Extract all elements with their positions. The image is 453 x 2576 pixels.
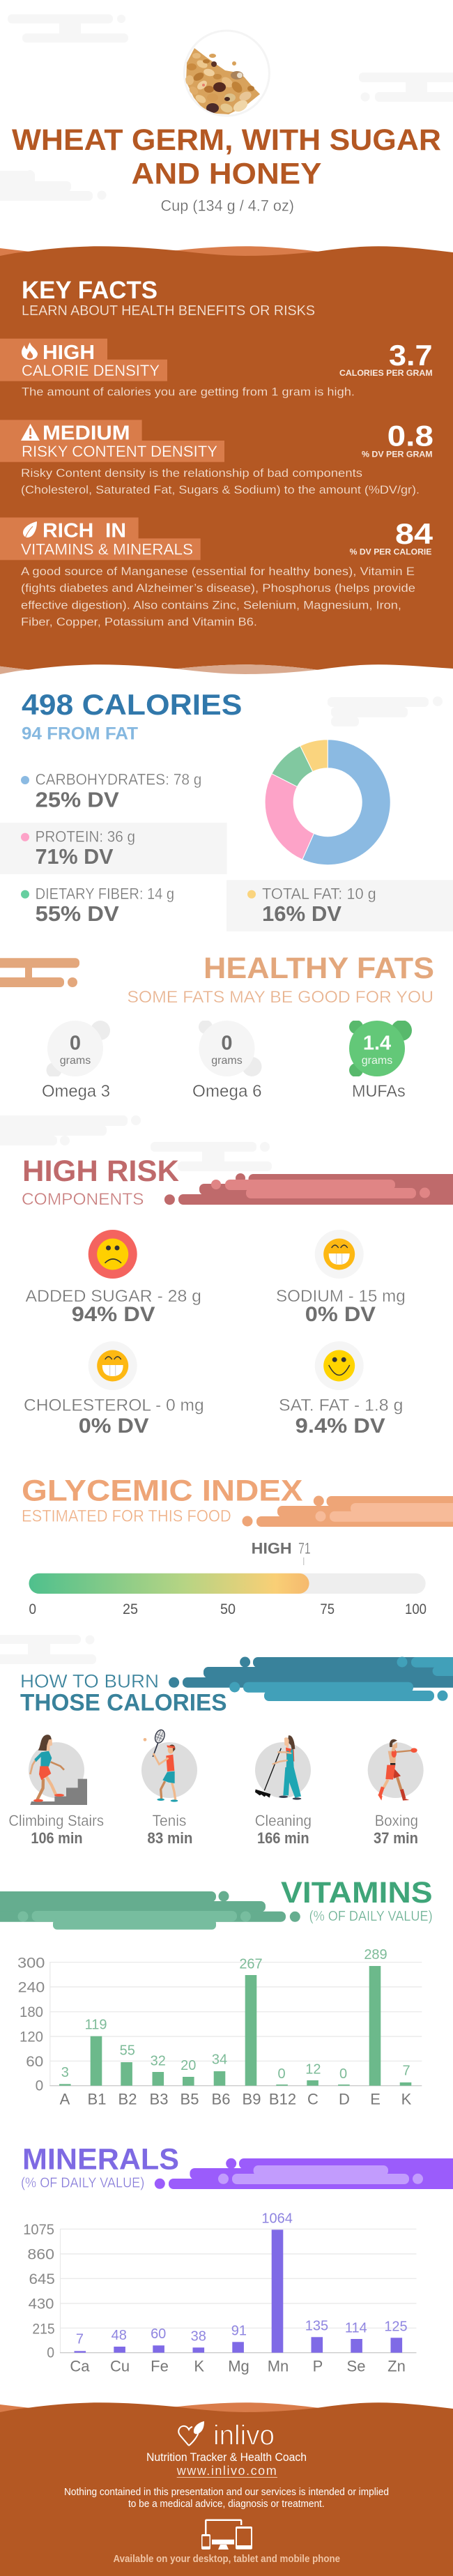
activity: climbing stairs: 106 min — [31, 1829, 83, 1847]
legend: protein — [0, 823, 227, 874]
metric: omega 3: 0 — [70, 1032, 81, 1055]
item: added sugar: 94% DV — [72, 1303, 155, 1326]
subheading: (% OF DAILY VALUE) — [309, 1909, 433, 1924]
fact: rich in vitamins and minerals: Fiber, Copper, Potassium and Vitamin B6. — [21, 616, 257, 628]
fact: rich in vitamins and minerals: VITAMINS & MINERALS — [21, 541, 193, 558]
gauge axis labels: 25 — [123, 1601, 138, 1617]
subheading: components: COMPONENTS — [22, 1190, 144, 1209]
bar chart: vitamins: 12 — [305, 2061, 321, 2077]
bar chart: vitamins: 0 — [36, 2078, 43, 2094]
item: saturated fat: SAT. FAT - 1.8 g — [279, 1396, 403, 1415]
legend: dietary fiber: 55% DV — [36, 901, 119, 926]
bar chart: minerals: 0 — [47, 2345, 54, 2361]
fact: calorie density: 3.7 — [389, 339, 433, 372]
bar chart: minerals: Zn — [387, 2358, 406, 2375]
heading: healthy fats: HEALTHY FATS — [204, 952, 434, 985]
subheading: ESTIMATED FOR THIS FOOD — [22, 1507, 231, 1525]
panel: healthy fats — [0, 952, 434, 1101]
bar chart: vitamins: K — [401, 2090, 412, 2108]
metric: omega 3: Omega 3 — [42, 1082, 110, 1101]
decorative banner — [0, 958, 79, 987]
fact: rich in vitamins and minerals: effective digestion). Also contains Zinc, Selenium, Magnesium, Iron, — [21, 599, 401, 611]
item: cholesterol: 0% DV — [79, 1415, 149, 1438]
bar chart: vitamins: 180 — [20, 2004, 43, 2020]
panel: minerals — [21, 2143, 453, 2375]
bar chart: vitamins: E — [370, 2090, 381, 2108]
activity: tennis: 83 min — [147, 1829, 192, 1847]
bar chart: vitamins: A — [60, 2090, 70, 2108]
logo: inlivo: inlivo — [213, 2421, 275, 2451]
gauge axis labels: 0 — [29, 1601, 36, 1617]
bar chart: minerals: Cu — [110, 2358, 130, 2375]
activity: boxing: Boxing — [375, 1812, 418, 1829]
bar chart: vitamins: 0 — [339, 2066, 347, 2082]
fact: rich in vitamins and minerals: (fights diabetes and Alzheimer’s disease), Phosphorus (helps provide — [21, 582, 415, 595]
metric: omega 3: grams — [60, 1055, 91, 1067]
bar chart: minerals: 135 — [305, 2319, 328, 2334]
bar chart: minerals: 60 — [151, 2326, 166, 2342]
activity: cleaning — [255, 1735, 312, 1847]
item: cholesterol — [24, 1341, 204, 1438]
heading: minerals: MINERALS — [22, 2143, 179, 2177]
activity: boxing: 37 min — [374, 1829, 418, 1847]
fact: calorie density: HIGH — [43, 342, 95, 364]
bar chart: vitamins: 267 — [239, 1956, 263, 1972]
bar chart: vitamins: B1 — [88, 2090, 106, 2108]
gauge axis labels: 50 — [220, 1601, 236, 1617]
bar chart: minerals — [23, 2211, 416, 2375]
legend: protein: PROTEIN: 36 g — [36, 828, 135, 846]
panel: key facts — [0, 246, 453, 674]
bar chart: vitamins: B3 — [150, 2090, 168, 2108]
bar chart: vitamins: 60 — [26, 2054, 43, 2070]
bar chart: minerals: P — [313, 2358, 323, 2375]
bar chart: vitamins: B6 — [212, 2090, 230, 2108]
gauge value label: HIGH — [252, 1539, 292, 1557]
bar chart: minerals: Fe — [151, 2358, 169, 2375]
activity: cleaning: 166 min — [257, 1829, 309, 1847]
bar chart: minerals: 48 — [112, 2328, 127, 2343]
decorative banner — [164, 1173, 453, 1205]
heading: vitamins: VITAMINS — [281, 1876, 433, 1910]
heading: glycemic index: GLYCEMIC INDEX — [22, 1474, 303, 1507]
bar chart: minerals: Mn — [268, 2358, 289, 2375]
panel: vitamins — [0, 1876, 433, 2108]
heading: calories: 498 CALORIES — [22, 688, 242, 721]
disclaimer: to be a medical advice, diagnosis or treatment. — [128, 2499, 325, 2510]
legend: protein: 71% DV — [36, 844, 114, 869]
bar chart: minerals: 125 — [384, 2319, 408, 2334]
metric: omega 3 — [42, 1021, 110, 1101]
bar chart: vitamins — [17, 1947, 422, 2108]
gauge axis labels: 75 — [320, 1601, 335, 1617]
gauge value label: 71 — [298, 1539, 311, 1557]
bar chart: minerals: 215 — [32, 2321, 55, 2337]
decorative banner — [0, 1891, 300, 1930]
item: sodium: 0% DV — [305, 1303, 376, 1326]
bar chart: minerals: 1075 — [23, 2222, 54, 2238]
legend: dietary fiber: DIETARY FIBER: 14 g — [36, 885, 174, 902]
legend: carbohydrates: CARBOHYDRATES: 78 g — [36, 771, 201, 788]
bar chart: vitamins: B5 — [181, 2090, 199, 2108]
gauge axis labels — [29, 1601, 427, 1617]
donut chart — [265, 740, 390, 865]
item: saturated fat: 9.4% DV — [295, 1415, 385, 1438]
item: cholesterol: CHOLESTEROL - 0 mg — [24, 1396, 204, 1415]
fact: risky content density — [0, 419, 433, 496]
bar chart: minerals: Se — [347, 2358, 365, 2375]
legend: total fat: 16% DV — [262, 901, 341, 926]
icon: leaf — [23, 521, 37, 538]
metric: MUFAs: grams — [362, 1055, 392, 1067]
bar chart: minerals: 91 — [231, 2323, 247, 2338]
title: AND HONEY — [131, 158, 322, 191]
metric: omega 6: grams — [211, 1055, 243, 1067]
activity: climbing stairs: Climbing Stairs — [8, 1812, 104, 1829]
metric: omega 6: Omega 6 — [192, 1082, 262, 1101]
fact: risky content density: (Cholesterol, Saturated Fat, Sugars & Sodium) to the amount (%DV/gr). — [21, 484, 420, 496]
item: added sugar — [25, 1230, 201, 1326]
bar chart: vitamins: 32 — [151, 2053, 166, 2068]
fact: risky content density: % DV PER GRAM — [362, 450, 433, 459]
title: WHEAT GERM, WITH SUGAR — [12, 123, 441, 157]
icon: warning triangle — [21, 424, 40, 441]
fact: calorie density — [0, 339, 433, 399]
subheading: SOME FATS MAY BE GOOD FOR YOU — [127, 988, 433, 1007]
item: sodium: SODIUM - 15 mg — [276, 1287, 406, 1306]
decorative banner — [169, 1656, 453, 1701]
heading: those calories: THOSE CALORIES — [20, 1689, 227, 1716]
subheading: from fat: 94 FROM FAT — [22, 724, 138, 744]
gauge value label — [252, 1539, 311, 1565]
fact: calorie density: CALORIE DENSITY — [22, 362, 160, 379]
decorative banner — [243, 1496, 453, 1527]
activity: climbing stairs — [8, 1735, 104, 1847]
heading: how to burn: HOW TO BURN — [20, 1671, 159, 1692]
bar chart: minerals: 114 — [345, 2320, 367, 2335]
panel: high risk components — [22, 1154, 453, 1438]
item: saturated fat — [279, 1341, 403, 1438]
fact: rich in vitamins and minerals: A good source of Manganese (essential for healthy bones), Vitamin E — [21, 565, 415, 578]
bar chart: vitamins: D — [339, 2090, 350, 2108]
serving size: Cup (134 g / 4.7 oz) — [160, 197, 294, 215]
bar chart: minerals: 38 — [191, 2329, 206, 2344]
legend: total fat — [227, 880, 453, 931]
fact: rich in vitamins and minerals: RICH IN — [43, 520, 126, 542]
fact: rich in vitamins and minerals: % DV PER CALORIE — [350, 547, 431, 557]
activity: boxing — [368, 1739, 424, 1847]
bar chart: vitamins: 3 — [61, 2065, 69, 2080]
icon: flame — [22, 342, 38, 360]
fact: risky content density: 0.8 — [387, 419, 433, 452]
gauge bar — [29, 1573, 426, 1594]
legend: total fat: TOTAL FAT: 10 g — [262, 885, 376, 902]
fact: calorie density: CALORIES PER GRAM — [339, 368, 433, 378]
bar chart: minerals: Mg — [228, 2358, 249, 2375]
bar chart: vitamins: 120 — [20, 2029, 43, 2045]
heading: key facts: KEY FACTS — [22, 277, 158, 304]
bar chart: minerals: 7 — [76, 2332, 84, 2347]
panel: how to burn calories — [8, 1656, 453, 1847]
activity: cleaning: Cleaning — [255, 1812, 312, 1829]
bar chart: vitamins: 300 — [17, 1956, 45, 1972]
title — [12, 123, 441, 191]
bar chart: vitamins: B9 — [243, 2090, 261, 2108]
fact: rich in vitamins and minerals: 84 — [395, 517, 433, 550]
bar chart: vitamins: 119 — [85, 2018, 107, 2033]
heading: high risk: HIGH RISK — [22, 1154, 179, 1188]
bar chart: minerals: K — [194, 2358, 204, 2375]
fact: risky content density: RISKY CONTENT DENSITY — [22, 443, 217, 460]
disclaimer — [64, 2487, 389, 2510]
metric: MUFAs: MUFAs — [352, 1082, 406, 1101]
metric: omega 6: 0 — [221, 1032, 233, 1055]
hero image: granola in a circle — [184, 31, 269, 116]
footer — [0, 2402, 453, 2576]
metric: omega 6 — [192, 1020, 262, 1101]
logo: inlivo — [178, 2421, 275, 2451]
subheading: (% OF DAILY VALUE) — [21, 2176, 144, 2191]
bar chart: vitamins: 34 — [212, 2052, 227, 2068]
bar chart: minerals: 430 — [29, 2296, 54, 2312]
bar chart: vitamins: 0 — [277, 2066, 286, 2082]
metric: MUFAs: 1.4 — [363, 1032, 391, 1055]
bar chart: minerals: 860 — [27, 2247, 54, 2263]
item: added sugar: ADDED SUGAR - 28 g — [25, 1287, 201, 1306]
panel: calories — [0, 688, 453, 931]
bar chart: minerals: 1064 — [261, 2211, 293, 2226]
activity: tennis — [141, 1728, 197, 1847]
legend: dietary fiber — [21, 885, 174, 926]
decorative banner — [155, 2158, 453, 2189]
activity: tennis: Tenis — [152, 1812, 186, 1829]
bar chart: vitamins: 240 — [18, 1980, 45, 1996]
bar chart: minerals: Ca — [70, 2358, 90, 2375]
legend: carbohydrates — [21, 771, 201, 811]
fact: risky content density: Risky Content density is the relationship of bad components — [21, 467, 362, 480]
bar chart: vitamins: 55 — [120, 2043, 135, 2059]
metric: MUFAs — [349, 1020, 412, 1101]
item: sodium — [276, 1230, 406, 1326]
legend: carbohydrates: 25% DV — [36, 787, 119, 811]
disclaimer: Nothing contained in this presentation and our services is intended or implied — [64, 2487, 389, 2498]
panel: glycemic index — [22, 1474, 453, 1617]
subheading: LEARN ABOUT HEALTH BENEFITS OR RISKS — [22, 303, 315, 319]
bar chart: vitamins: B2 — [118, 2090, 137, 2108]
bar chart: vitamins: 20 — [181, 2058, 196, 2073]
bar chart: vitamins: C — [307, 2090, 318, 2108]
bar chart: vitamins: B12 — [269, 2090, 296, 2108]
bar chart: vitamins: 289 — [364, 1947, 387, 1963]
fact: calorie density: The amount of calories you are getting from 1 gram is high. — [22, 386, 355, 399]
gauge axis labels: 100 — [405, 1601, 427, 1617]
tagline: Nutrition Tracker & Health Coach — [146, 2451, 307, 2464]
bar chart: minerals: 645 — [29, 2271, 55, 2287]
fact: risky content density: MEDIUM — [43, 422, 130, 445]
fact: rich in vitamins and minerals — [0, 517, 433, 628]
bar chart: vitamins: 7 — [402, 2064, 410, 2079]
icon: devices — [201, 2520, 252, 2550]
website: www.inlivo.com — [176, 2464, 277, 2478]
availability note: Available on your desktop, tablet and mobile phone — [113, 2553, 340, 2565]
